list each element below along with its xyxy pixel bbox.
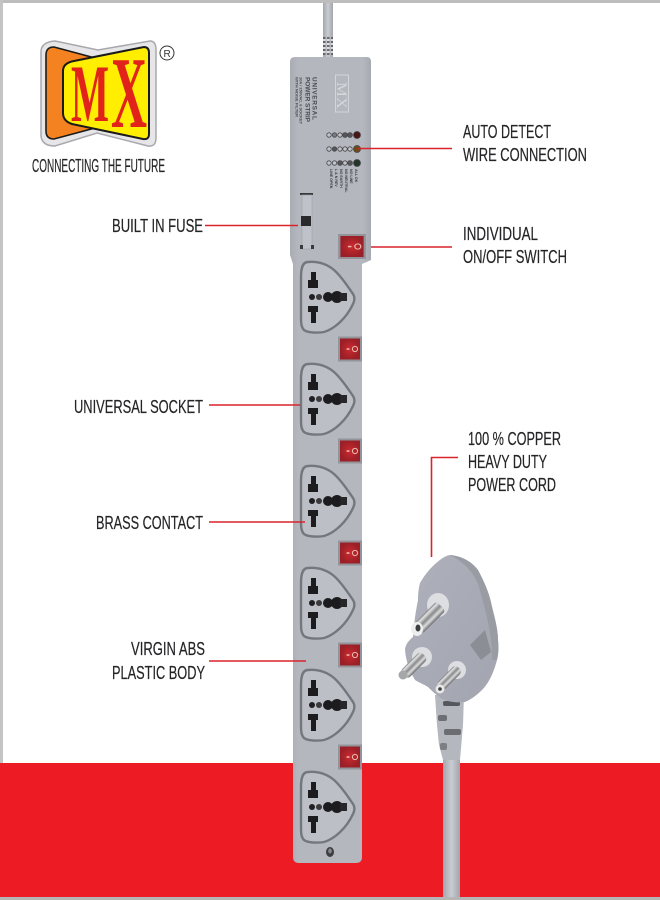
LED legend: L & N REV xyxy=(334,169,338,187)
printed product name: WITH NOISE FILTER xyxy=(294,77,300,117)
label: virgin abs plastic body xyxy=(112,639,205,683)
printed product name: 10A / 250VAC, 6 SOCKET xyxy=(298,77,304,125)
label: copper power cord: HEAVY DUTY xyxy=(468,452,547,472)
label: virgin abs plastic body: VIRGIN ABS xyxy=(131,639,205,659)
label: individual on/off switch: ON/OFF SWITCH xyxy=(463,247,567,267)
LED legend: LINE OPEN xyxy=(329,169,333,189)
red base band xyxy=(0,763,660,900)
printed product name xyxy=(294,77,318,125)
logo: MX xyxy=(41,37,156,150)
label: auto detect wire connection: AUTO DETECT xyxy=(463,122,551,142)
label: brass contact: BRASS CONTACT xyxy=(96,513,203,533)
power strip xyxy=(290,57,371,863)
plug side rim and shadow xyxy=(450,555,498,660)
label: individual on/off switch: INDIVIDUAL xyxy=(463,224,538,244)
label: copper power cord: 100 % COPPER xyxy=(468,429,561,449)
LED legend: NO EARTH xyxy=(339,169,343,188)
label: copper power cord xyxy=(468,429,561,495)
plug body xyxy=(405,555,498,702)
registered mark xyxy=(160,46,174,60)
strip body xyxy=(290,57,371,863)
callout leader lines xyxy=(205,148,458,661)
label: virgin abs plastic body: PLASTIC BODY xyxy=(112,663,205,683)
label: copper power cord: POWER CORD xyxy=(468,475,556,495)
lower cord xyxy=(443,755,460,897)
mounting screw xyxy=(326,847,334,857)
LED legend: NO LINE xyxy=(349,169,353,184)
printed product name: UNIVERSAL xyxy=(310,77,318,120)
plug pins xyxy=(398,593,466,694)
label: auto detect wire connection xyxy=(463,122,587,165)
label: built in fuse: BUILT IN FUSE xyxy=(112,216,203,236)
strain relief xyxy=(435,695,464,760)
socket row xyxy=(301,262,354,843)
built in fuse holder xyxy=(300,193,314,249)
label: auto detect wire connection: WIRE CONNECTION xyxy=(463,145,587,165)
LED legend: ALL OK xyxy=(354,169,358,183)
LED legend xyxy=(329,169,358,193)
tagline: CONNECTING THE FUTURE xyxy=(32,156,165,176)
printed MX mark: MX xyxy=(333,82,349,109)
printed product name: POWER STRIP xyxy=(304,77,310,123)
indicator LEDs xyxy=(327,132,360,166)
LED legend: NO NEUTRAL xyxy=(344,169,348,193)
top cord xyxy=(323,3,333,57)
logo: MX: M xyxy=(71,48,109,139)
logo: MX: X xyxy=(111,37,147,150)
label: individual on/off switch xyxy=(463,224,567,267)
label: universal socket: UNIVERSAL SOCKET xyxy=(74,397,203,417)
printed MX mark xyxy=(333,75,349,112)
registered mark: R xyxy=(164,49,171,60)
power plug and cord xyxy=(398,555,498,897)
switch row xyxy=(338,234,366,770)
